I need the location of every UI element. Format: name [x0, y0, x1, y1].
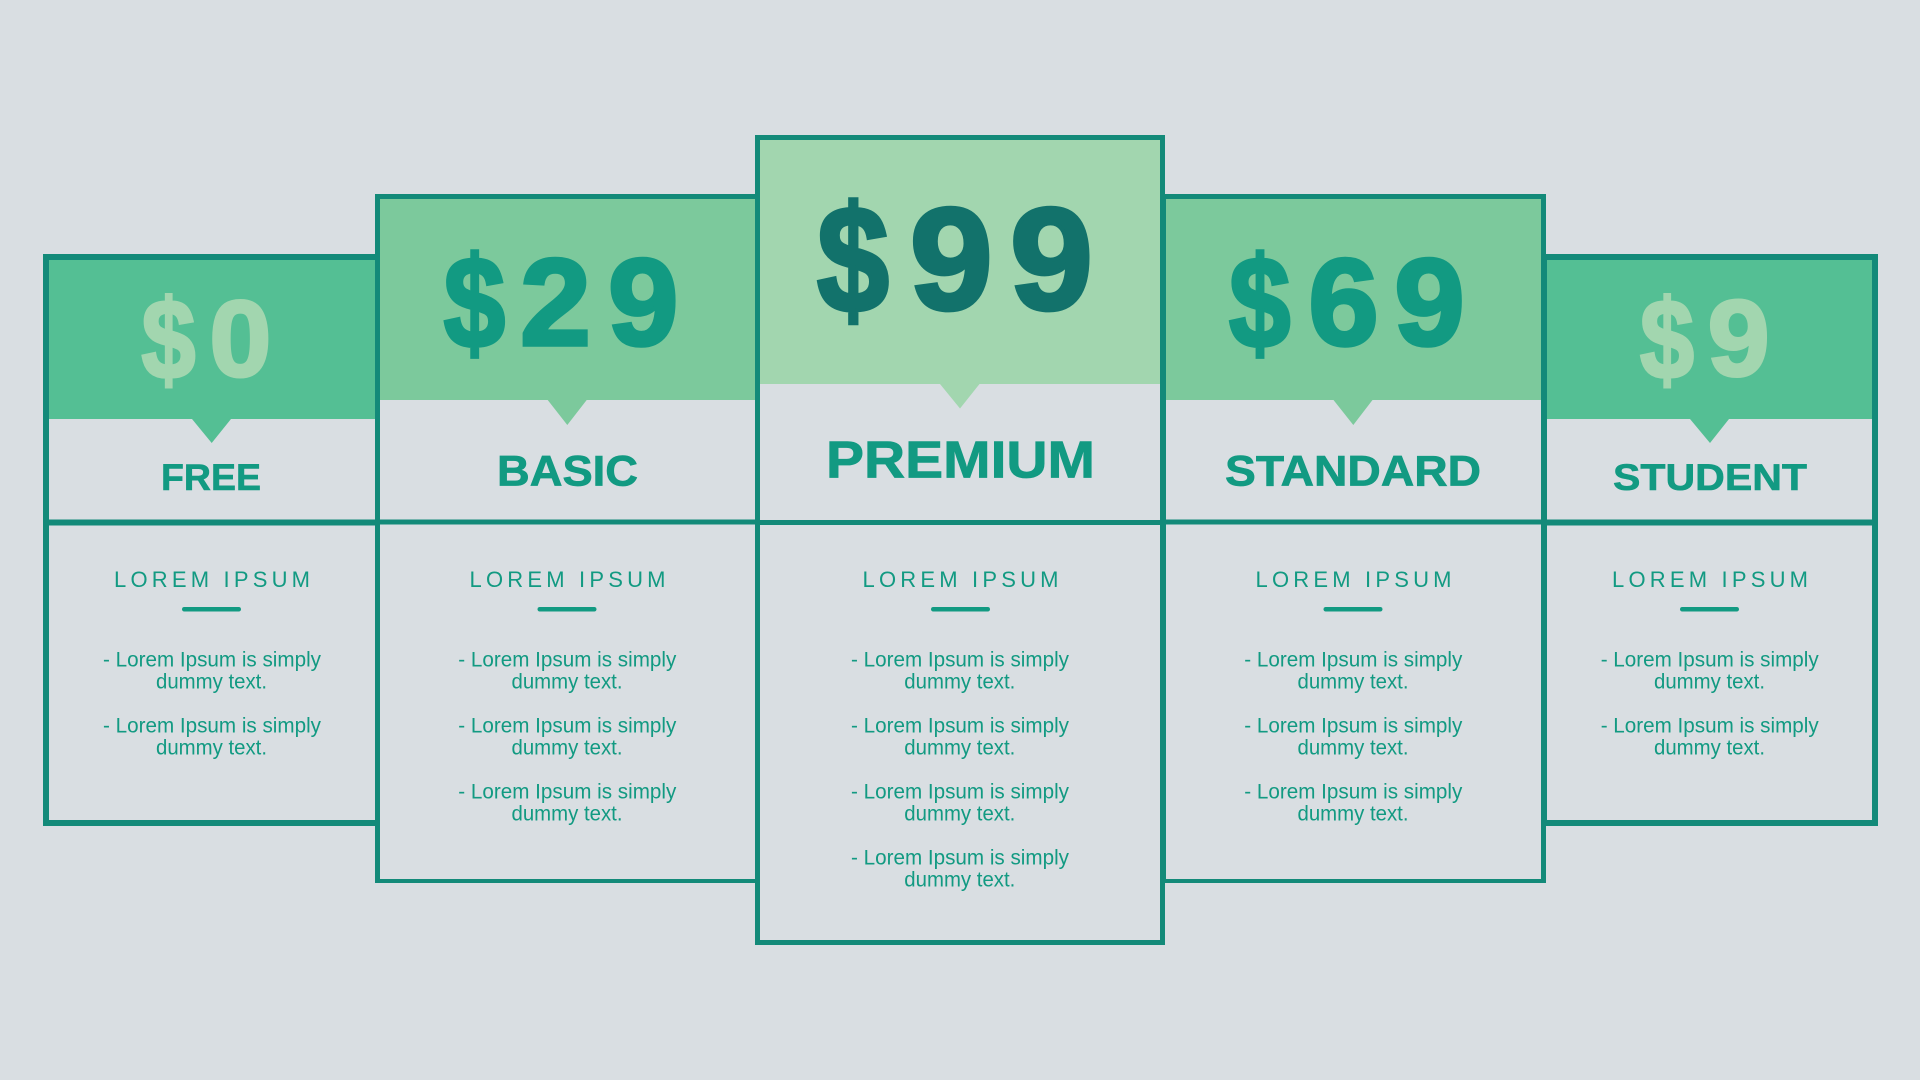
price: $29: [444, 230, 678, 376]
feature list: standard: dummy text.: [1298, 802, 1408, 826]
price: $69: $: [1229, 230, 1290, 376]
icon: premium pointer: [940, 384, 980, 408]
feature list: standard: dummy text.: [1298, 670, 1408, 694]
feature list: standard: - Lorem Ipsum is simply: [1244, 648, 1463, 672]
price: $29: $: [444, 230, 505, 376]
panel: basic plan: [375, 194, 760, 883]
feature list: basic: - Lorem Ipsum is simply: [458, 648, 677, 672]
feature list: premium: - Lorem Ipsum is simply: [851, 780, 1069, 804]
icon: free pointer: [192, 419, 231, 443]
feature list: free: dummy text.: [156, 736, 267, 760]
subheading: standard: LOREM IPSUM: [1256, 567, 1452, 592]
name: basic: BASIC: [497, 448, 638, 496]
feature list: basic: - Lorem Ipsum is simply: [458, 714, 677, 738]
subheading: basic: LOREM IPSUM: [470, 567, 666, 592]
name: premium: PREMIUM: [826, 432, 1095, 490]
feature list: basic: [458, 648, 677, 826]
price: $9: 9: [1708, 278, 1770, 398]
feature list: standard: - Lorem Ipsum is simply: [1244, 780, 1463, 804]
feature list: basic: dummy text.: [512, 802, 622, 826]
feature list: free: dummy text.: [156, 670, 267, 694]
price: $0: [142, 276, 271, 402]
feature list: free: [103, 648, 321, 760]
feature list: basic: dummy text.: [512, 736, 622, 760]
divider: standard: [1324, 607, 1382, 612]
subheading: premium: LOREM IPSUM: [862, 567, 1058, 592]
feature list: student: dummy text.: [1654, 670, 1765, 694]
divider: student: [1680, 607, 1739, 612]
name: free: FREE: [161, 457, 261, 498]
feature list: student: - Lorem Ipsum is simply: [1601, 714, 1819, 738]
feature list: premium: - Lorem Ipsum is simply: [851, 846, 1069, 870]
feature list: premium: - Lorem Ipsum is simply: [851, 648, 1069, 672]
feature list: premium: dummy text.: [904, 868, 1015, 892]
feature list: standard: dummy text.: [1298, 736, 1408, 760]
feature list: basic: dummy text.: [512, 670, 622, 694]
divider: basic: [538, 607, 596, 612]
feature list: student: dummy text.: [1654, 736, 1765, 760]
feature list: premium: dummy text.: [904, 736, 1015, 760]
icon: standard pointer: [1334, 400, 1372, 425]
price: $69: 6: [1308, 235, 1379, 372]
price: $9: [1640, 276, 1770, 402]
price: $69: [1229, 230, 1465, 376]
feature list: standard: [1244, 648, 1463, 826]
name: standard: STANDARD: [1225, 448, 1481, 496]
name: student: STUDENT: [1613, 457, 1807, 498]
feature list: standard: - Lorem Ipsum is simply: [1244, 714, 1463, 738]
feature list: premium: [851, 648, 1069, 892]
feature list: free: - Lorem Ipsum is simply: [103, 714, 321, 738]
feature list: premium: dummy text.: [904, 802, 1015, 826]
price: $99: [817, 175, 1093, 345]
price: $99: $: [817, 175, 889, 345]
price: $69: 9: [1394, 235, 1465, 372]
feature list: student: [1601, 648, 1819, 760]
panel: standard plan: [1160, 194, 1546, 883]
price: $9: $: [1640, 276, 1694, 402]
feature list: free: - Lorem Ipsum is simply: [103, 648, 321, 672]
divider: free: [182, 607, 241, 612]
icon: student pointer: [1690, 419, 1729, 443]
feature list: student: - Lorem Ipsum is simply: [1601, 648, 1819, 672]
divider: premium: [931, 607, 990, 612]
panel: free plan: [43, 254, 380, 826]
feature list: premium: dummy text.: [904, 670, 1015, 694]
subheading: student: LOREM IPSUM: [1612, 567, 1808, 592]
icon: basic pointer: [548, 400, 587, 425]
price: $0: 0: [209, 278, 271, 399]
panel: premium plan: [755, 135, 1165, 945]
price: $0: $: [142, 276, 196, 402]
feature list: basic: - Lorem Ipsum is simply: [458, 780, 677, 804]
subheading: free: LOREM IPSUM: [114, 567, 310, 592]
price: $99: 9: [910, 178, 993, 340]
feature list: premium: - Lorem Ipsum is simply: [851, 714, 1069, 738]
price: $29: 9: [608, 235, 678, 372]
panel: student plan: [1541, 254, 1878, 826]
price: $99: 9: [1010, 178, 1093, 340]
price: $29: 2: [520, 235, 591, 372]
